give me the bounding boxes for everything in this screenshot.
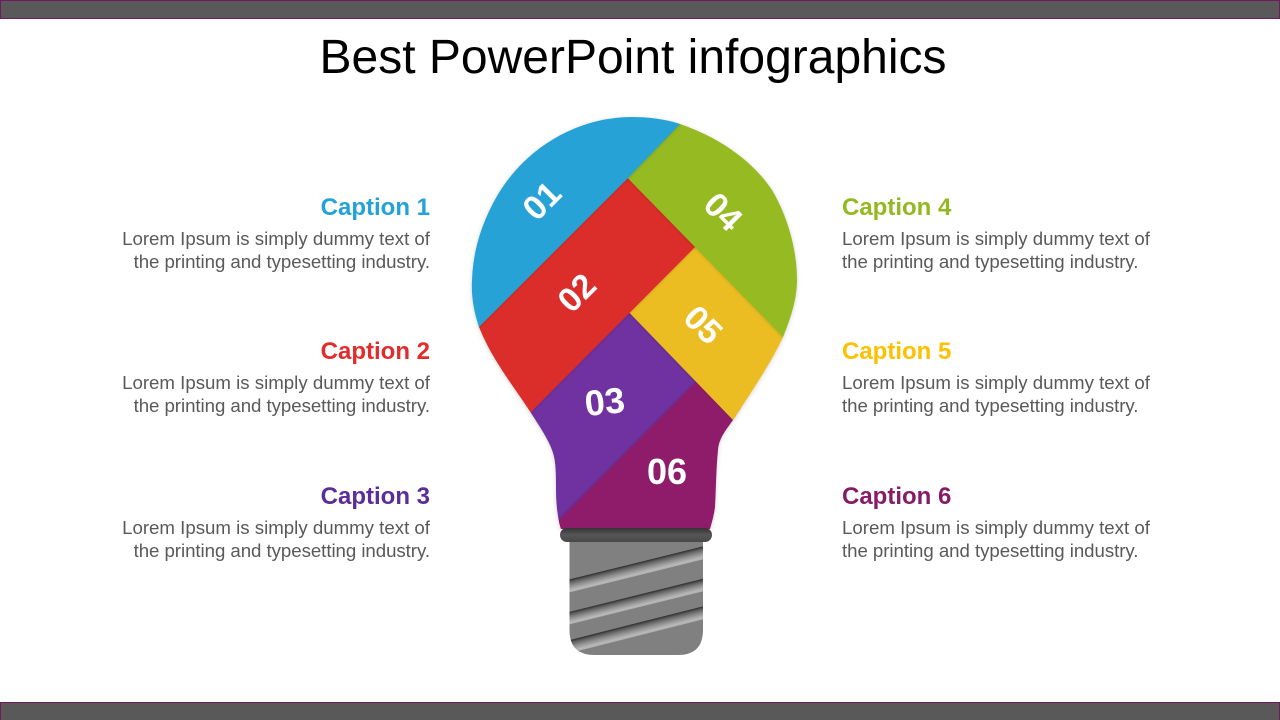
screw base: [570, 542, 703, 655]
caption 6: the printing and typesetting industry.: [842, 540, 1138, 561]
caption 1: the printing and typesetting industry.: [134, 251, 430, 272]
caption 2: the printing and typesetting industry.: [134, 395, 430, 416]
caption 4: [842, 194, 1150, 272]
caption 4: the printing and typesetting industry.: [842, 251, 1138, 272]
caption 6: Lorem Ipsum is simply dummy text of: [842, 517, 1150, 538]
number 01: 01: [515, 174, 569, 228]
caption 2: Caption 2: [321, 338, 430, 365]
segment 01 blue: [470, 116, 681, 328]
top bar: [0, 0, 1280, 19]
light bulb: [460, 100, 810, 660]
caption 4: Caption 4: [842, 194, 951, 221]
number 06: 06: [647, 451, 687, 492]
caption 2: [122, 338, 430, 416]
caption 5: Lorem Ipsum is simply dummy text of: [842, 372, 1150, 393]
caption 1: Caption 1: [321, 194, 430, 221]
caption 6: Caption 6: [842, 483, 951, 510]
segment 06 magenta: [558, 382, 742, 530]
caption 2: Lorem Ipsum is simply dummy text of: [122, 372, 430, 393]
caption 3: [122, 483, 430, 561]
segment 02 red: [478, 178, 696, 414]
bulb glass segments: [470, 116, 799, 531]
number 05: 05: [676, 298, 730, 352]
caption 4: Lorem Ipsum is simply dummy text of: [842, 228, 1150, 249]
number 04: 04: [696, 185, 750, 239]
caption 3: Lorem Ipsum is simply dummy text of: [122, 517, 430, 538]
caption 5: Caption 5: [842, 338, 951, 365]
number 02: 02: [550, 266, 604, 320]
segment 04 green: [627, 121, 799, 338]
caption 3: Caption 3: [321, 483, 430, 510]
segment 05 yellow: [629, 247, 787, 420]
number labels: [515, 174, 750, 492]
bottom bar: [0, 702, 1280, 720]
collar: [560, 528, 712, 542]
caption 1: Lorem Ipsum is simply dummy text of: [122, 228, 430, 249]
title: Best PowerPoint infographics: [320, 31, 946, 84]
caption 5: the printing and typesetting industry.: [842, 395, 1138, 416]
caption 6: [842, 483, 1150, 561]
segment 03 purple: [530, 313, 697, 529]
caption 1: [122, 194, 430, 272]
caption 3: the printing and typesetting industry.: [134, 540, 430, 561]
caption 5: [842, 338, 1150, 416]
number 03: 03: [583, 379, 627, 424]
